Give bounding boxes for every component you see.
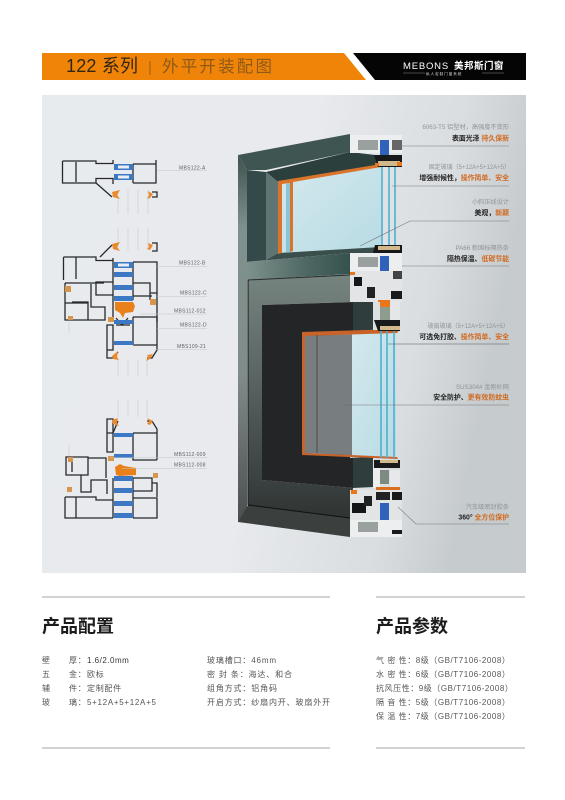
left spec list: 5+12A+5+12A+5: [87, 698, 157, 707]
left spec list: 玻: [42, 697, 51, 707]
callout: fixed glass: 增强耐候性，操作简单、安全: [419, 173, 509, 182]
parameter list: 抗风压性：9级（GB/T7106-2008）: [376, 683, 513, 693]
header banner: [42, 53, 526, 80]
section rules: [42, 597, 525, 748]
window render: [238, 134, 402, 537]
lower frame face: [248, 274, 353, 518]
section drawings: [62, 160, 158, 518]
callout: mesh: 安全防护、更有效防蚊虫: [433, 392, 509, 402]
panel: product parameters: [376, 616, 513, 721]
callout: seal: [398, 503, 509, 524]
left spec list: 五: [42, 670, 51, 679]
dark mesh: [262, 302, 353, 488]
part labels: MBS122-D: [180, 322, 207, 328]
callout: fixed glass: 固定玻璃（5+12A+5+12A+5）: [429, 163, 510, 171]
title: |: [148, 59, 152, 76]
glass panes: [381, 165, 395, 458]
left spec list: 厚：: [69, 656, 86, 665]
lower frame bottom: [238, 505, 350, 537]
transom bar: [247, 253, 350, 280]
parameter list: 气 密 性：8级（GB/T7106-2008）: [376, 655, 510, 665]
callout: thermal break: [402, 244, 509, 266]
part labels: MBS122-C: [180, 290, 207, 296]
part labels: MBS109-21: [177, 344, 206, 350]
callout: bead: [360, 198, 509, 246]
callout: mesh: [343, 383, 509, 405]
callout: thermal break: PA66 新国标隔热条: [455, 244, 509, 252]
logo: [403, 60, 504, 76]
left spec list: 辅: [42, 683, 51, 693]
light mesh: [304, 331, 352, 456]
left edge strip: [238, 155, 248, 522]
part labels: MBS112-012: [174, 308, 206, 314]
logo: MEBONS: [403, 61, 449, 72]
callout: casement glass: 玻扇玻璃（5+12A+5+12A+5）: [428, 322, 509, 330]
callout: seal: 汽车级密封胶条: [466, 503, 509, 511]
top cross-section: [350, 135, 402, 167]
section B and C: [64, 242, 157, 322]
logo: 美邦斯门窗: [454, 60, 504, 72]
lower glass: [350, 329, 396, 458]
left spec list: 金：: [69, 669, 86, 679]
bottom cross-section: [350, 460, 402, 537]
part labels: MBS122-A: [179, 166, 206, 172]
callout: fixed glass: [392, 163, 510, 186]
section 009: [107, 418, 157, 461]
parameter list: 水 密 性：6级（GB/T7106-2008）: [376, 669, 510, 679]
title: 外平开装配图: [162, 57, 274, 76]
orange title band: [42, 53, 366, 80]
right spec list: 开启方式：纱扇内开、玻扇外开: [207, 697, 331, 707]
black logo band: [353, 53, 526, 80]
upper opening reveal: [247, 152, 380, 262]
parameter list: 隔 音 性：5级（GB/T7106-2008）: [376, 697, 510, 707]
callout: casement glass: [388, 322, 509, 344]
title: 122 系列: [66, 56, 138, 76]
callout: casement glass: 可选免打胶、操作简单、安全: [419, 332, 509, 341]
callout: profile: [402, 123, 509, 146]
callout: bead: 美观，新颖: [475, 208, 509, 217]
section A: [62, 160, 157, 199]
title: [66, 56, 274, 76]
callout: profile: 6063-T5 铝型材，高强度不变形: [422, 123, 509, 131]
right spec list: 密 封 条：海达、和合: [207, 669, 293, 679]
orange connector 012: [115, 302, 135, 318]
left spec list: 壁: [42, 655, 51, 665]
orange connector 008: [115, 464, 136, 476]
upper glass: [278, 164, 381, 254]
right spec list: 组角方式：铝角码: [207, 683, 278, 693]
left spec list: 欧标: [87, 669, 104, 679]
section D: [107, 317, 157, 361]
right spec list: 玻璃槽口：46mm: [207, 655, 277, 665]
ghost lines: [69, 190, 148, 460]
left spec list: 璃：: [69, 697, 86, 707]
parameter list: [376, 655, 513, 721]
callout: mesh: SUS304# 金刚纱网: [456, 383, 509, 391]
part labels: MBS122-B: [179, 260, 206, 266]
callout: seal: 360° 全方位保护: [458, 512, 509, 522]
section base: [65, 457, 158, 518]
heading: 产品参数: [376, 616, 448, 636]
part labels: MBS112-009: [174, 452, 206, 458]
left spec list: 件：: [69, 683, 86, 693]
right spec list: [207, 655, 331, 707]
panel: product configuration: [42, 616, 331, 707]
logo: 私人定制门窗系统: [426, 71, 462, 76]
callout: profile: 表面光泽 持久保新: [452, 134, 509, 142]
heading: 产品配置: [42, 616, 114, 636]
left spec list: 定制配件: [87, 683, 122, 693]
part labels: [110, 166, 207, 468]
feature callouts: [343, 123, 510, 524]
callout: thermal break: 隔热保温、低碳节能: [447, 254, 509, 263]
panel: product image: [42, 95, 526, 573]
parameter list: 保 温 性：7级（GB/T7106-2008）: [376, 711, 510, 721]
upper frame top face: [238, 134, 350, 170]
callout: bead: 小斜压线设计: [472, 198, 509, 206]
left spec list: [42, 655, 157, 707]
left spec list: 1.6/2.0mm: [87, 656, 129, 665]
part labels: MBS112-008: [174, 462, 206, 468]
middle cross-section: [350, 245, 402, 331]
